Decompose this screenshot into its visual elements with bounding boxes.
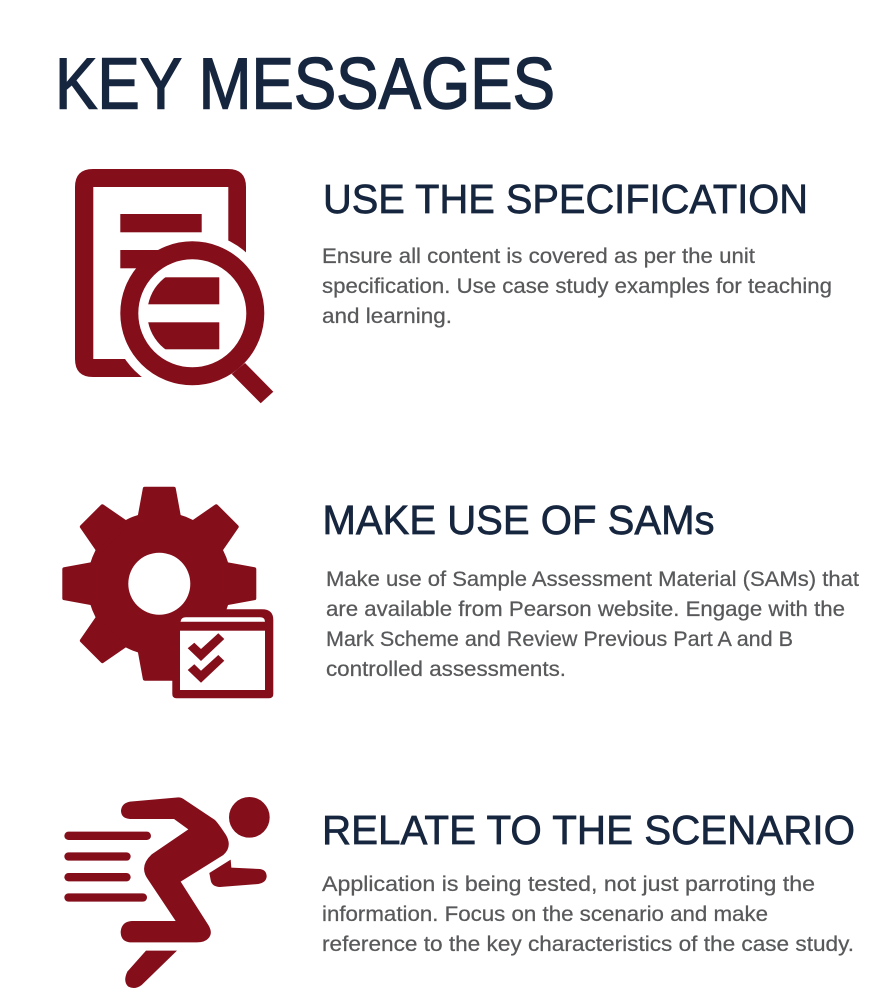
title: KEY MESSAGES — [55, 44, 555, 124]
body text: specification. Use case study examples for teaching — [322, 275, 832, 298]
icon: document with magnifying glass — [75, 169, 274, 403]
body text: controlled assessments. — [326, 658, 566, 681]
body text: Mark Scheme and Review Previous Part A and B — [326, 628, 793, 651]
panel: use the specification — [75, 169, 832, 403]
icon: running figure — [64, 797, 270, 988]
body text: Application is being tested, not just parroting the — [322, 873, 815, 896]
heading: RELATE TO THE SCENARIO — [322, 807, 855, 853]
body text: reference to the key characteristics of the case study. — [322, 933, 854, 956]
heading: MAKE USE OF SAMs — [322, 497, 714, 543]
body text — [326, 568, 859, 681]
body text: Ensure all content is covered as per the unit — [322, 245, 755, 268]
icon: gear with checklist window — [64, 489, 273, 698]
panel: make use of SAMs — [64, 489, 859, 698]
body text: Make use of Sample Assessment Material (SAMs) that — [326, 568, 859, 591]
body text: are available from Pearson website. Engage with the — [326, 598, 845, 621]
body text: and learning. — [322, 305, 452, 328]
body text — [322, 873, 854, 956]
body text: information. Focus on the scenario and make — [322, 903, 768, 926]
heading: USE THE SPECIFICATION — [323, 176, 808, 222]
body text — [322, 245, 832, 328]
panel: relate to the scenario — [64, 797, 855, 988]
